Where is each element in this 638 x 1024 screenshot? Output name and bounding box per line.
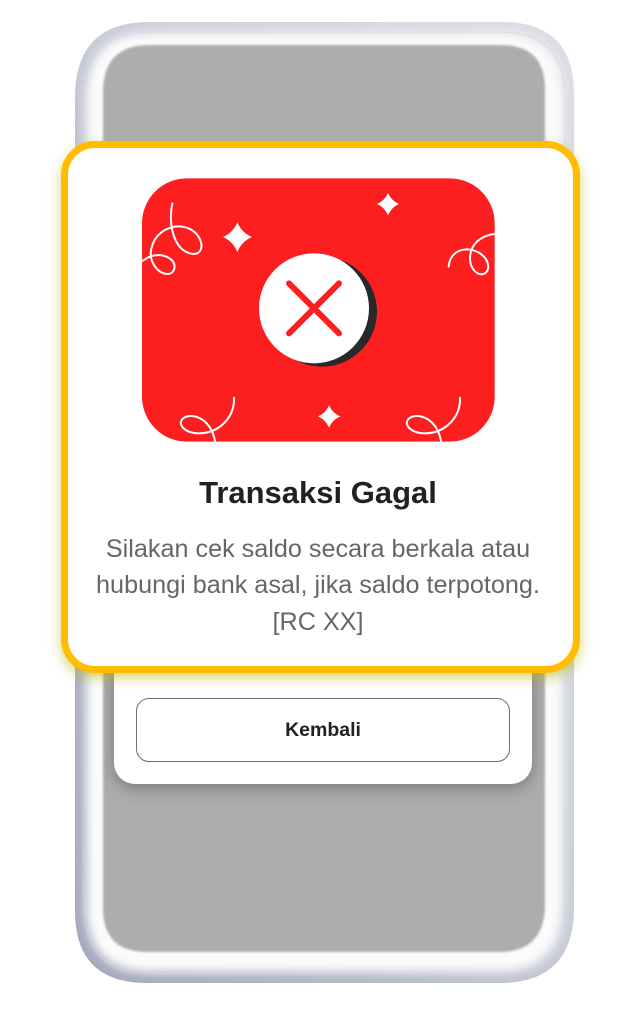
card background <box>61 141 580 673</box>
dialog behind card <box>114 640 532 784</box>
message text: [RC XX] <box>272 608 363 636</box>
title: Transaksi Gagal <box>199 475 437 510</box>
message text: Silakan cek saldo secara berkala atau <box>106 535 530 563</box>
panel: failed transaction card <box>52 137 589 687</box>
message text <box>96 535 540 636</box>
button: Kembali <box>136 698 510 762</box>
icon: cross in circle <box>259 253 377 367</box>
icon: sparkles <box>223 193 399 428</box>
button: Kembali: Kembali <box>285 719 361 741</box>
illustration: red failure banner <box>142 178 495 442</box>
phone mockup <box>75 22 574 983</box>
message text: hubungi bank asal, jika saldo terpotong. <box>96 571 540 599</box>
